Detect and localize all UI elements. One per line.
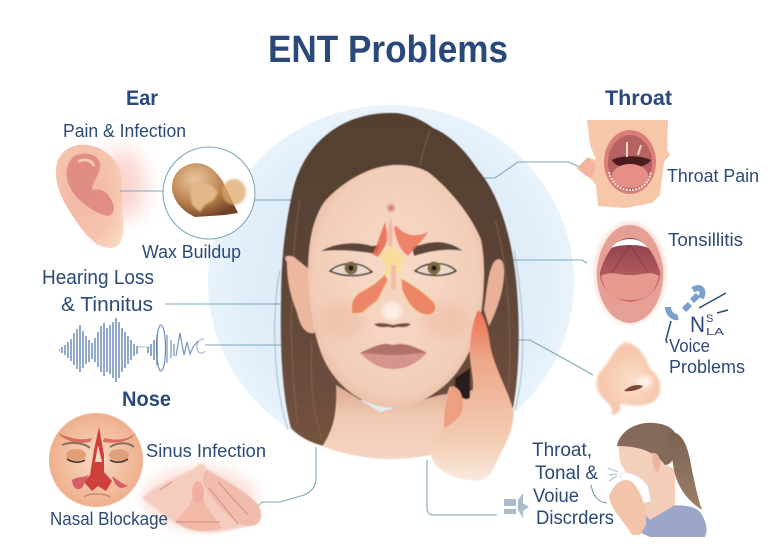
hand: [430, 310, 514, 480]
icon: voice problems glitch: N: [690, 312, 705, 337]
label: Voice Problems: [669, 336, 745, 377]
right eye: [415, 262, 456, 276]
left ear: [285, 256, 315, 333]
hair back: [281, 113, 519, 447]
lips: [360, 344, 427, 369]
label: Hearing Loss & Tinnitus: [42, 267, 154, 316]
title: ENT Problems: [268, 29, 508, 71]
section heading: Throat: Throat: [605, 87, 672, 110]
nose: [373, 280, 412, 327]
icon: voice problems glitch: S: [706, 313, 713, 325]
label: Throat, Tonal & Voice Disorders: Voiue: [533, 486, 579, 507]
icon: voice problems glitch: [666, 288, 728, 343]
label: Voice Problems: Problems: [669, 357, 745, 377]
label: Throat, Tonal & Voice Disorders: Discrders: [536, 508, 614, 529]
icon: arrow pointer: [504, 493, 529, 518]
illustration: throat pain: [576, 120, 670, 208]
background disk: [208, 105, 574, 459]
label: Tonsillitis: Tonsillitis: [668, 230, 743, 250]
neck: [320, 385, 475, 462]
right ear: [484, 259, 504, 326]
label: Hearing Loss & Tinnitus: Hearing Loss: [42, 267, 154, 289]
central portrait: [275, 113, 523, 480]
label: Throat Pain: Throat Pain: [667, 166, 759, 186]
eyebrows: [321, 243, 380, 254]
illustration: wax circle: [163, 147, 255, 239]
sinus overlay: [351, 217, 436, 315]
illustration: hands on nose: [142, 464, 261, 532]
illustration: nose: [596, 342, 660, 415]
label: Throat, Tonal & Voice Disorders: Tonal &: [535, 463, 598, 484]
illustration: ear: [56, 145, 165, 248]
cheek blush: [317, 302, 367, 338]
label: Throat, Tonal & Voice Disorders: Throat,: [532, 440, 592, 461]
label: Throat, Tonal & Voice Disorders: [532, 440, 614, 529]
section heading: Nose: Nose: [122, 388, 171, 411]
forehead spot: [388, 204, 394, 212]
label: Voice Problems: Voice: [669, 336, 710, 356]
label: Sinus Infection: Sinus Infection: [146, 441, 266, 461]
section heading: Ear: Ear: [126, 87, 158, 110]
connector lines: [165, 162, 593, 515]
face: [308, 165, 484, 408]
illustration: tonsillitis mouth: [594, 222, 666, 324]
icon: voice problems glitch: LA: [706, 327, 724, 338]
label: Nasal Blockage: Nasal Blockage: [50, 509, 168, 529]
illustration: sinus face circle: [49, 413, 143, 507]
hair strands: [291, 130, 510, 440]
left eye: [330, 262, 372, 276]
chart: sound wave: [59, 318, 205, 382]
neck shadow: [455, 368, 470, 414]
label: Hearing Loss & Tinnitus: & Tinnitus: [61, 294, 153, 316]
label: Wax Buildup: Wax Buildup: [142, 242, 241, 262]
label: Pain & Infection: Pain & Infection: [63, 121, 186, 141]
illustration: sneezing woman: [591, 423, 707, 537]
